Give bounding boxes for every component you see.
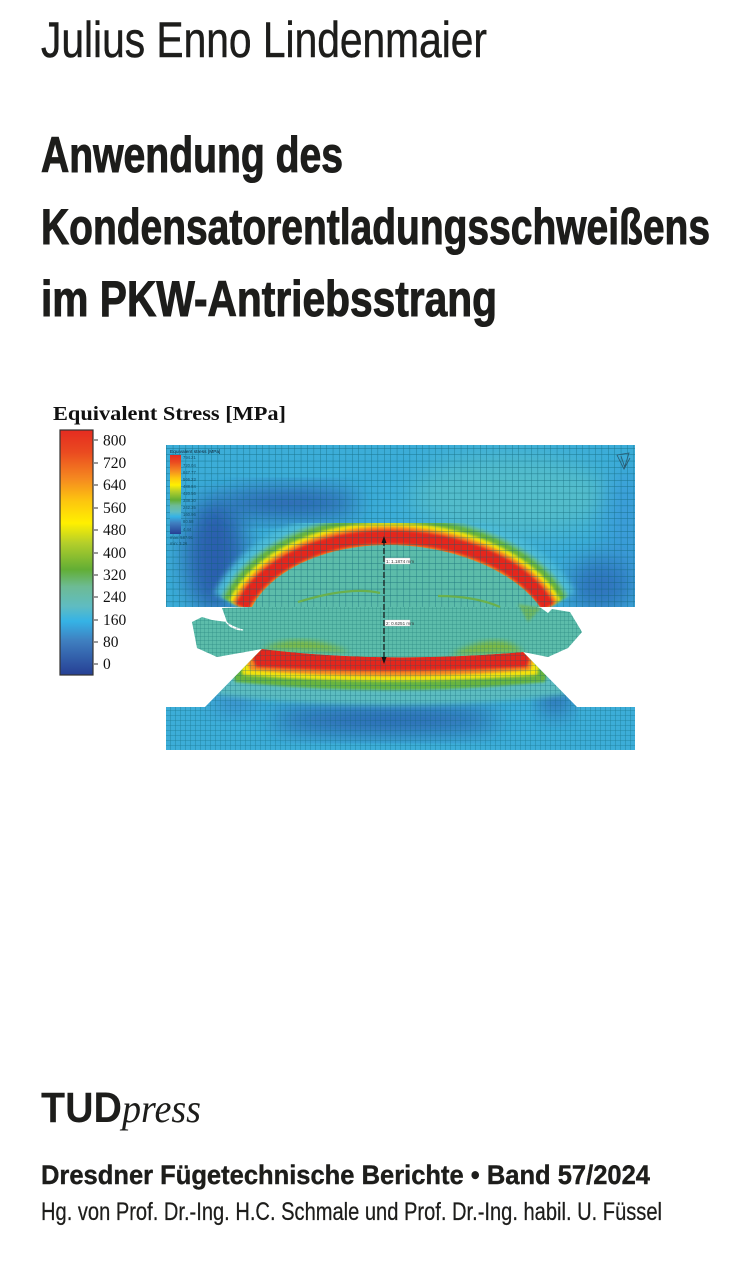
embedded simulation legend: min: 3.26 [170,541,188,546]
embedded simulation legend [170,449,220,546]
legend title: Equivalent Stress [MPa] [53,403,286,425]
author name: Julius Enno Lindenmaier [41,12,487,68]
embedded simulation legend: 720.04 [183,463,196,468]
colour scale legend: 80 [103,634,119,651]
colour scale legend: 160 [103,612,126,629]
colour scale legend: 480 [103,522,126,539]
embedded simulation legend: 794.21 [183,455,196,460]
colour scale legend: 720 [103,455,126,472]
embedded simulation legend: 338.30 [183,498,196,503]
embedded simulation legend: 80.58 [183,519,194,524]
embedded simulation legend: 566.23 [183,477,196,482]
publisher logo: TUD [41,1084,122,1132]
embedded simulation legend: Equivalent stress [MPa] [170,449,220,455]
colour scale legend: 240 [103,589,126,606]
colour scale legend: 560 [103,500,126,517]
embedded simulation legend: 242.35 [183,505,196,510]
weld nugget and flash [192,591,582,657]
embedded simulation legend: 160.96 [183,512,196,517]
embedded simulation legend: 4.44 [183,527,192,532]
series line: Dresdner Fügetechnische Berichte • Band 57/2024 [41,1160,650,1190]
colour scale legend: 640 [103,477,126,494]
colour scale legend: 0 [103,656,111,673]
FEM stress simulation figure [166,445,645,750]
embedded simulation legend: 488.84 [183,484,196,489]
publisher logo [41,1084,201,1132]
book title: im PKW-Antriebsstrang [41,271,497,327]
book title: Anwendung des [41,127,343,183]
embedded simulation legend: 420.56 [183,491,196,496]
thickness measurement arrows: 1: 1.1874 mm [386,559,414,564]
colour scale legend [60,430,126,675]
lower sheet with stress field [166,640,635,750]
publisher logo: press [119,1086,201,1131]
inner dome [252,545,540,607]
book title [41,127,710,327]
upper sheet with stress field [166,445,645,613]
colour scale legend: 400 [103,545,126,562]
colour scale legend: 800 [103,432,126,450]
embedded simulation legend: 647.77 [183,470,196,475]
colour scale legend: 320 [103,567,126,584]
embedded simulation legend: max: 587.91 [170,535,194,540]
thickness measurement arrows [382,536,414,664]
axis triad icon [617,453,630,469]
thickness measurement arrows: 2: 0.6251 mm [386,621,414,626]
